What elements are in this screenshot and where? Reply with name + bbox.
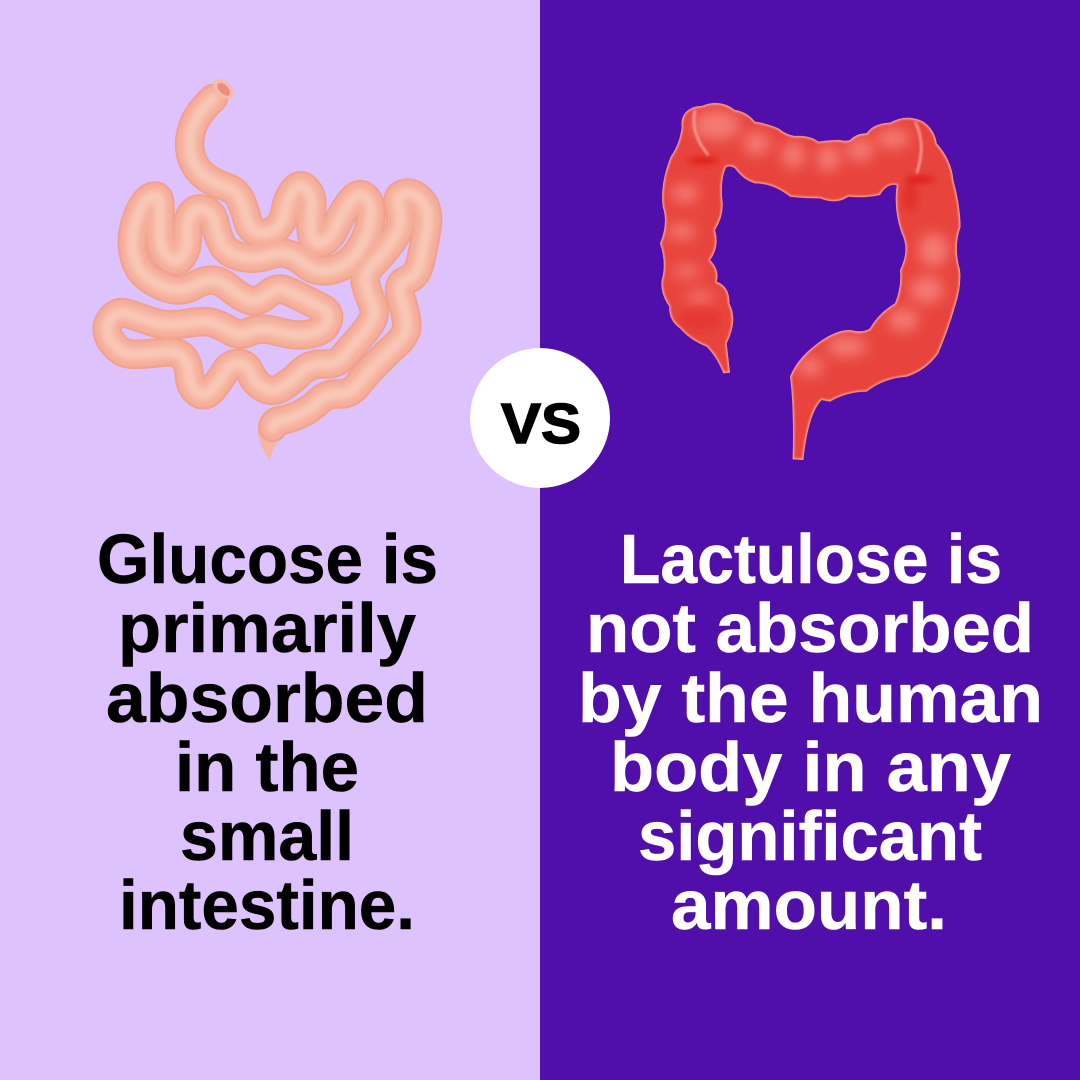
panel: glucose background: [0, 0, 540, 1080]
text block: glucose statement: small: [180, 797, 354, 875]
text block: glucose statement: absorbed: [106, 659, 428, 737]
text block: glucose statement: [97, 520, 438, 944]
text block: lactulose statement: amount.: [671, 866, 947, 944]
icon: large intestine: [653, 97, 967, 463]
text block: glucose statement: intestine.: [119, 866, 415, 944]
text block: lactulose statement: Lactulose is: [620, 520, 1002, 598]
text block: lactulose statement: significant: [638, 797, 982, 875]
text block: glucose statement: in the: [175, 728, 359, 806]
vs badge: [470, 348, 610, 488]
icon: small intestine: [107, 75, 428, 461]
text block: lactulose statement: by the human: [578, 659, 1043, 737]
panel: lactulose background: [540, 0, 1080, 1080]
text block: lactulose statement: not absorbed: [586, 589, 1034, 667]
text block: glucose statement: Glucose is: [97, 520, 438, 598]
text block: lactulose statement: body in any: [610, 728, 1011, 806]
text block: lactulose statement: [578, 520, 1043, 944]
text block: glucose statement: primarily: [118, 589, 416, 667]
vs badge: VS: [501, 392, 581, 456]
